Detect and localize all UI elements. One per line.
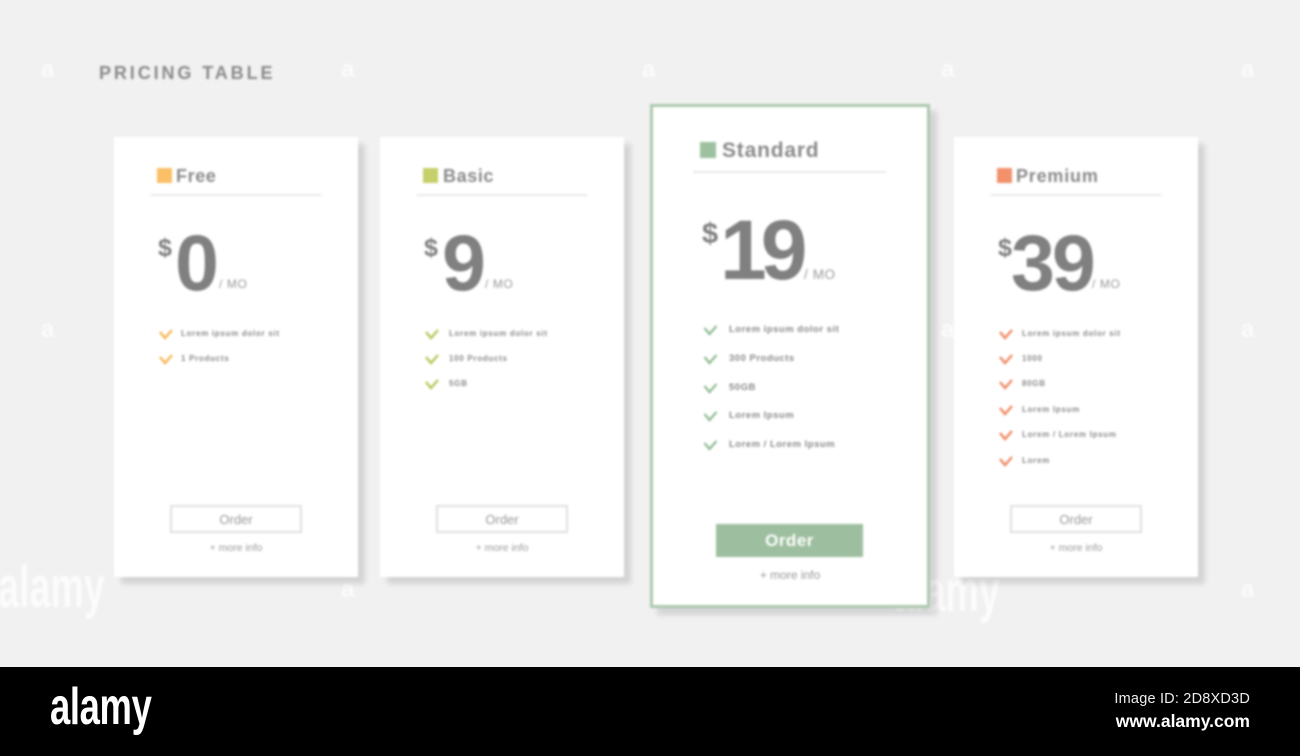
plan name: Premium: Premium bbox=[1016, 166, 1099, 186]
feature list: Premium: 80GB bbox=[1022, 379, 1046, 388]
watermark: faint alamy marks: a bbox=[1241, 56, 1254, 83]
plan name: Free: Free bbox=[176, 166, 216, 186]
feature list: Premium bbox=[998, 328, 1121, 468]
price: $9 per month: / MO bbox=[485, 277, 513, 291]
button: Order (primary): Order bbox=[765, 531, 814, 550]
footer bar bbox=[0, 667, 1300, 756]
watermark: faint alamy marks: a bbox=[1241, 576, 1254, 603]
price: $0 per month: 0 bbox=[175, 218, 216, 307]
price: $39 per month bbox=[997, 218, 1120, 307]
price: $9 per month: 9 bbox=[442, 218, 483, 307]
feature list: Premium: Lorem ipsum dolor sit bbox=[1022, 329, 1121, 338]
feature list: Standard: 50GB bbox=[729, 382, 756, 393]
price: $0 per month: $ bbox=[158, 234, 172, 262]
plan name: Standard: Standard bbox=[722, 139, 819, 162]
feature list: Free bbox=[158, 328, 280, 366]
link: more info: + more info bbox=[760, 568, 820, 582]
feature list: Premium: Lorem Ipsum bbox=[1022, 405, 1080, 414]
icon: Premium swatch bbox=[997, 168, 1012, 183]
panel: Free plan bbox=[114, 137, 358, 577]
feature list: Basic: 100 Products bbox=[449, 354, 508, 363]
link: more info: + more info bbox=[210, 542, 262, 554]
feature list: Standard: 300 Products bbox=[729, 353, 795, 364]
button: Order: Order bbox=[485, 512, 519, 527]
button: Order: Order bbox=[1059, 512, 1093, 527]
link: more info: + more info bbox=[476, 542, 528, 554]
button: Order: Order bbox=[219, 512, 253, 527]
watermark: faint alamy marks: a bbox=[41, 56, 54, 83]
feature list: Premium: Lorem bbox=[1022, 456, 1050, 465]
feature list: Free: 1 Products bbox=[181, 354, 229, 363]
icon: Free swatch bbox=[157, 168, 172, 183]
watermark: faint alamy marks: a bbox=[1241, 316, 1254, 343]
panel: Standard plan bbox=[650, 104, 930, 608]
icon: Standard swatch bbox=[700, 142, 716, 158]
feature list: Standard: Lorem ipsum dolor sit bbox=[729, 324, 839, 335]
plan name: Basic: Basic bbox=[443, 166, 494, 186]
watermark: faint alamy marks: alamy bbox=[893, 559, 1000, 624]
feature list: Standard bbox=[702, 324, 840, 452]
website url: www.alamy.com bbox=[1116, 711, 1250, 731]
price: $39 per month: / MO bbox=[1092, 277, 1120, 291]
watermark: faint alamy marks: a bbox=[642, 56, 655, 83]
icon: Basic swatch bbox=[423, 168, 438, 183]
watermark: faint alamy marks: a bbox=[941, 316, 954, 343]
link: more info: + more info bbox=[1050, 542, 1102, 554]
price: $0 per month bbox=[157, 218, 248, 307]
panel: Premium plan bbox=[954, 137, 1198, 577]
watermark: faint alamy marks: a bbox=[41, 316, 54, 343]
watermark: faint alamy marks: a bbox=[341, 316, 354, 343]
feature list: Basic: 5GB bbox=[449, 379, 468, 388]
feature list: Free: Lorem ipsum dolor sit bbox=[181, 329, 280, 338]
feature list: Basic bbox=[424, 328, 548, 391]
watermark: faint alamy marks: a bbox=[341, 56, 354, 83]
price: $0 per month: / MO bbox=[219, 277, 247, 291]
price: $19 per month: $ bbox=[702, 218, 718, 250]
title: PRICING TABLE bbox=[99, 63, 275, 83]
price: $19 per month: / MO bbox=[804, 267, 836, 282]
watermark: faint alamy marks: a bbox=[941, 56, 954, 83]
logo: alamy: alamy bbox=[50, 678, 151, 736]
button: Order bbox=[170, 505, 302, 533]
feature list: Standard: Lorem / Lorem Ipsum bbox=[729, 439, 835, 450]
price: $9 per month: $ bbox=[424, 234, 438, 262]
price: $9 per month bbox=[423, 218, 514, 307]
button: Order bbox=[1010, 505, 1142, 533]
feature list: Premium: Lorem / Lorem Ipsum bbox=[1022, 430, 1117, 439]
image id: Image ID: 2D8XD3D bbox=[1114, 691, 1250, 707]
button: Order bbox=[436, 505, 568, 533]
feature list: Basic: Lorem ipsum dolor sit bbox=[449, 329, 548, 338]
feature list: Premium: 1000 bbox=[1022, 354, 1043, 363]
price: $19 per month: 19 bbox=[720, 203, 801, 297]
price: $39 per month: $ bbox=[998, 234, 1012, 262]
price: $39 per month: 39 bbox=[1011, 218, 1093, 307]
price: $19 per month bbox=[701, 203, 836, 297]
feature list: Standard: Lorem Ipsum bbox=[729, 410, 794, 421]
button: Order (primary) bbox=[716, 524, 863, 557]
watermark: faint alamy marks: a bbox=[341, 576, 354, 603]
panel: Basic plan bbox=[380, 137, 624, 577]
watermark: faint alamy marks: alamy bbox=[0, 555, 105, 620]
